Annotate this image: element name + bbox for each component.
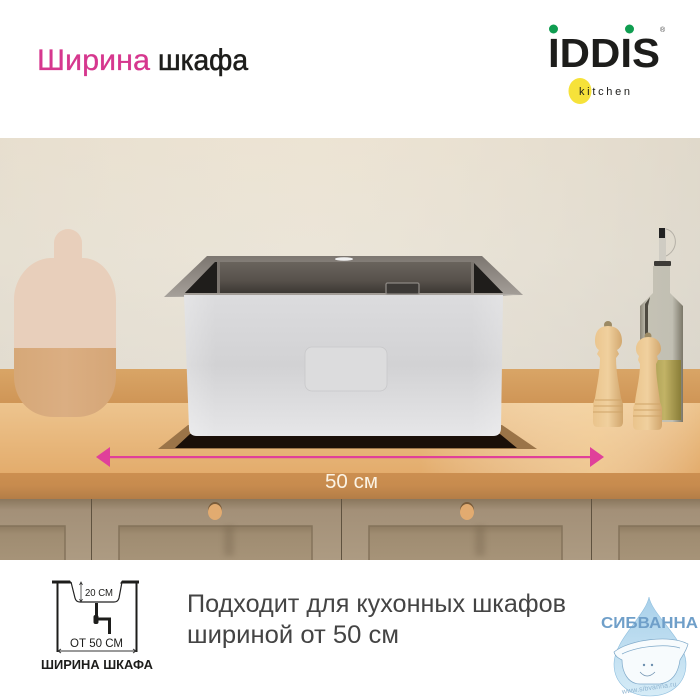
drain overflow (386, 283, 419, 294)
sink profile (71, 582, 122, 602)
sink body (184, 295, 503, 436)
faucet hole (335, 257, 353, 261)
bottle shadowed left line (645, 297, 650, 360)
title second word: шкафа (158, 44, 248, 77)
depth label: 20 СМ (85, 588, 113, 599)
countertop cut-out (158, 425, 537, 449)
countertop front edge (0, 473, 700, 499)
watermark bath rim (622, 646, 680, 654)
kitchen photo scene (0, 138, 700, 566)
bottle ring handle (666, 229, 675, 256)
sink flange (164, 256, 523, 297)
watermark bath face (643, 664, 653, 666)
cabinet panels (0, 526, 700, 566)
countertop lip left (52, 580, 72, 584)
sink (164, 256, 523, 436)
watermark: Sibvanna (601, 597, 698, 696)
countertop (0, 403, 700, 474)
cut-out dark opening (175, 434, 517, 448)
tall mill rings (593, 400, 623, 412)
tall mill body (593, 326, 623, 427)
logo registered mark: ® (660, 26, 666, 34)
tall mill knob (604, 321, 612, 329)
bottle oil (648, 360, 681, 420)
bottle spout (659, 228, 666, 262)
description text (187, 590, 566, 649)
width arrow (96, 447, 604, 467)
description line 1: Подходит для кухонных шкафов (187, 590, 566, 618)
bowl side shine (217, 262, 220, 293)
bottle body (640, 266, 683, 422)
logo wordmark: IDDIS (548, 30, 660, 76)
board pale top (14, 229, 116, 348)
cabinet width diagram (41, 580, 154, 672)
description line 2: шириной от 50 см (187, 621, 399, 649)
bowl dark corners (185, 262, 218, 293)
watermark url: www.sibvanna.ru (621, 681, 677, 696)
cabinet walls (58, 583, 136, 652)
depth arrow (80, 582, 82, 602)
watermark brand name: СИБВАННА (601, 615, 698, 632)
arrow head right (590, 447, 604, 467)
watermark bath (614, 639, 688, 684)
arrow head left (96, 447, 110, 467)
arrow line (108, 456, 592, 458)
width label: 50 см (325, 470, 378, 493)
knob left (208, 502, 222, 520)
board wooden bottom (14, 348, 116, 417)
knob right (460, 502, 474, 520)
short mill body (633, 337, 662, 430)
cutting board (14, 229, 116, 417)
wall (0, 138, 700, 370)
knob shadows (224, 526, 485, 556)
bottle cap (654, 261, 671, 266)
oil bottle (640, 228, 683, 422)
siphon (96, 603, 110, 634)
logo green dots (549, 24, 634, 34)
short mill rings (633, 404, 662, 416)
pepper mill short (633, 332, 662, 430)
short mill knob (644, 332, 652, 340)
logo: IDDIS kitchen (548, 24, 666, 104)
wooden backsplash (0, 369, 700, 404)
cabinets (0, 499, 700, 566)
sink body label (305, 347, 387, 391)
sink bowl interior (185, 262, 503, 293)
watermark drop (614, 597, 686, 696)
cabinet door gaps (92, 499, 592, 560)
white bottom strip (0, 560, 700, 700)
cut-out edge (158, 425, 537, 449)
title: Ширина (37, 44, 150, 77)
pepper mill tall (593, 321, 623, 427)
sink rim front (164, 294, 523, 297)
logo kitchen word: kitchen (579, 86, 630, 98)
countertop lip right (120, 580, 139, 584)
diagram caption: ШИРИНА ШКАФА (41, 657, 154, 672)
logo yellow spot (568, 78, 592, 104)
width dimension label: ОТ 50 СМ (70, 638, 123, 650)
width dimension line (58, 649, 136, 653)
